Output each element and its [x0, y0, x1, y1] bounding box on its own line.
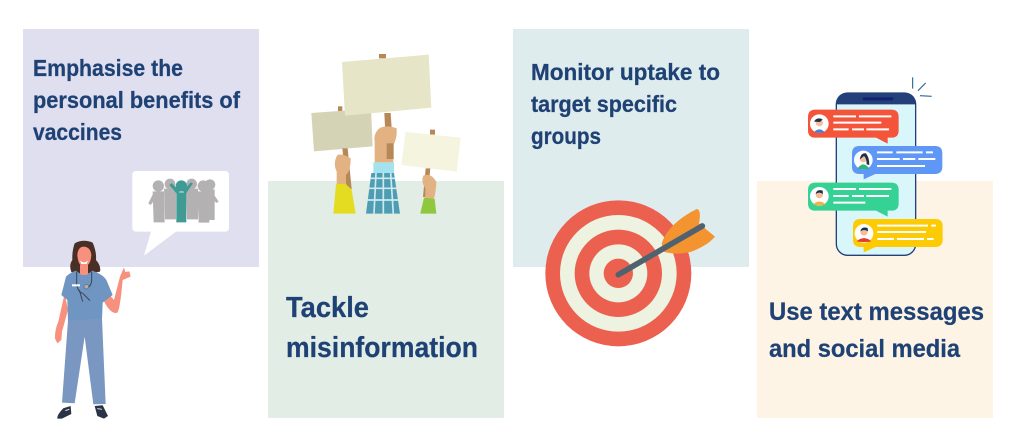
icon: speech bubble with group of people [132, 171, 229, 256]
heading: use text messages and social media [769, 298, 984, 363]
panel: text messages background [757, 181, 993, 418]
chat bubble: yellow [853, 219, 943, 252]
centre placard and arm [342, 54, 431, 214]
chat bubble: green [808, 183, 899, 217]
left placard and arm [311, 106, 373, 214]
phone [836, 77, 932, 255]
heading: tackle misinformation: misinformation [286, 332, 478, 364]
heading: emphasise the personal benefits of vaccines [33, 55, 240, 145]
heading: use text messages and social media: and social media [769, 335, 961, 363]
illustration: nurse with thumb up [55, 241, 131, 419]
chat bubble: red [808, 110, 899, 144]
heading: emphasise the personal benefits of vaccines: personal benefits of [33, 87, 240, 113]
illustration: hands holding placards [311, 54, 461, 214]
heading: tackle misinformation [286, 292, 478, 364]
panel: monitor uptake background [513, 29, 749, 267]
heading: tackle misinformation: Tackle [286, 292, 369, 324]
heading: use text messages and social media: Use text messages [769, 298, 984, 326]
icon: target with arrow [545, 200, 715, 346]
heading: monitor uptake to target specific groups: target specific [531, 91, 677, 117]
panel: misinformation background [268, 181, 504, 418]
heading: monitor uptake to target specific groups: Monitor uptake to [531, 59, 720, 85]
panel: personal benefits background [23, 29, 259, 267]
heading: emphasise the personal benefits of vaccines: Emphasise the [33, 55, 183, 81]
heading: emphasise the personal benefits of vaccines: vaccines [33, 119, 122, 145]
icon: smartphone with chat messages [808, 77, 943, 255]
heading: monitor uptake to target specific groups [531, 59, 720, 149]
chat bubble: blue [852, 146, 942, 179]
heading: monitor uptake to target specific groups: groups [531, 123, 601, 149]
right placard and arm [401, 130, 461, 214]
